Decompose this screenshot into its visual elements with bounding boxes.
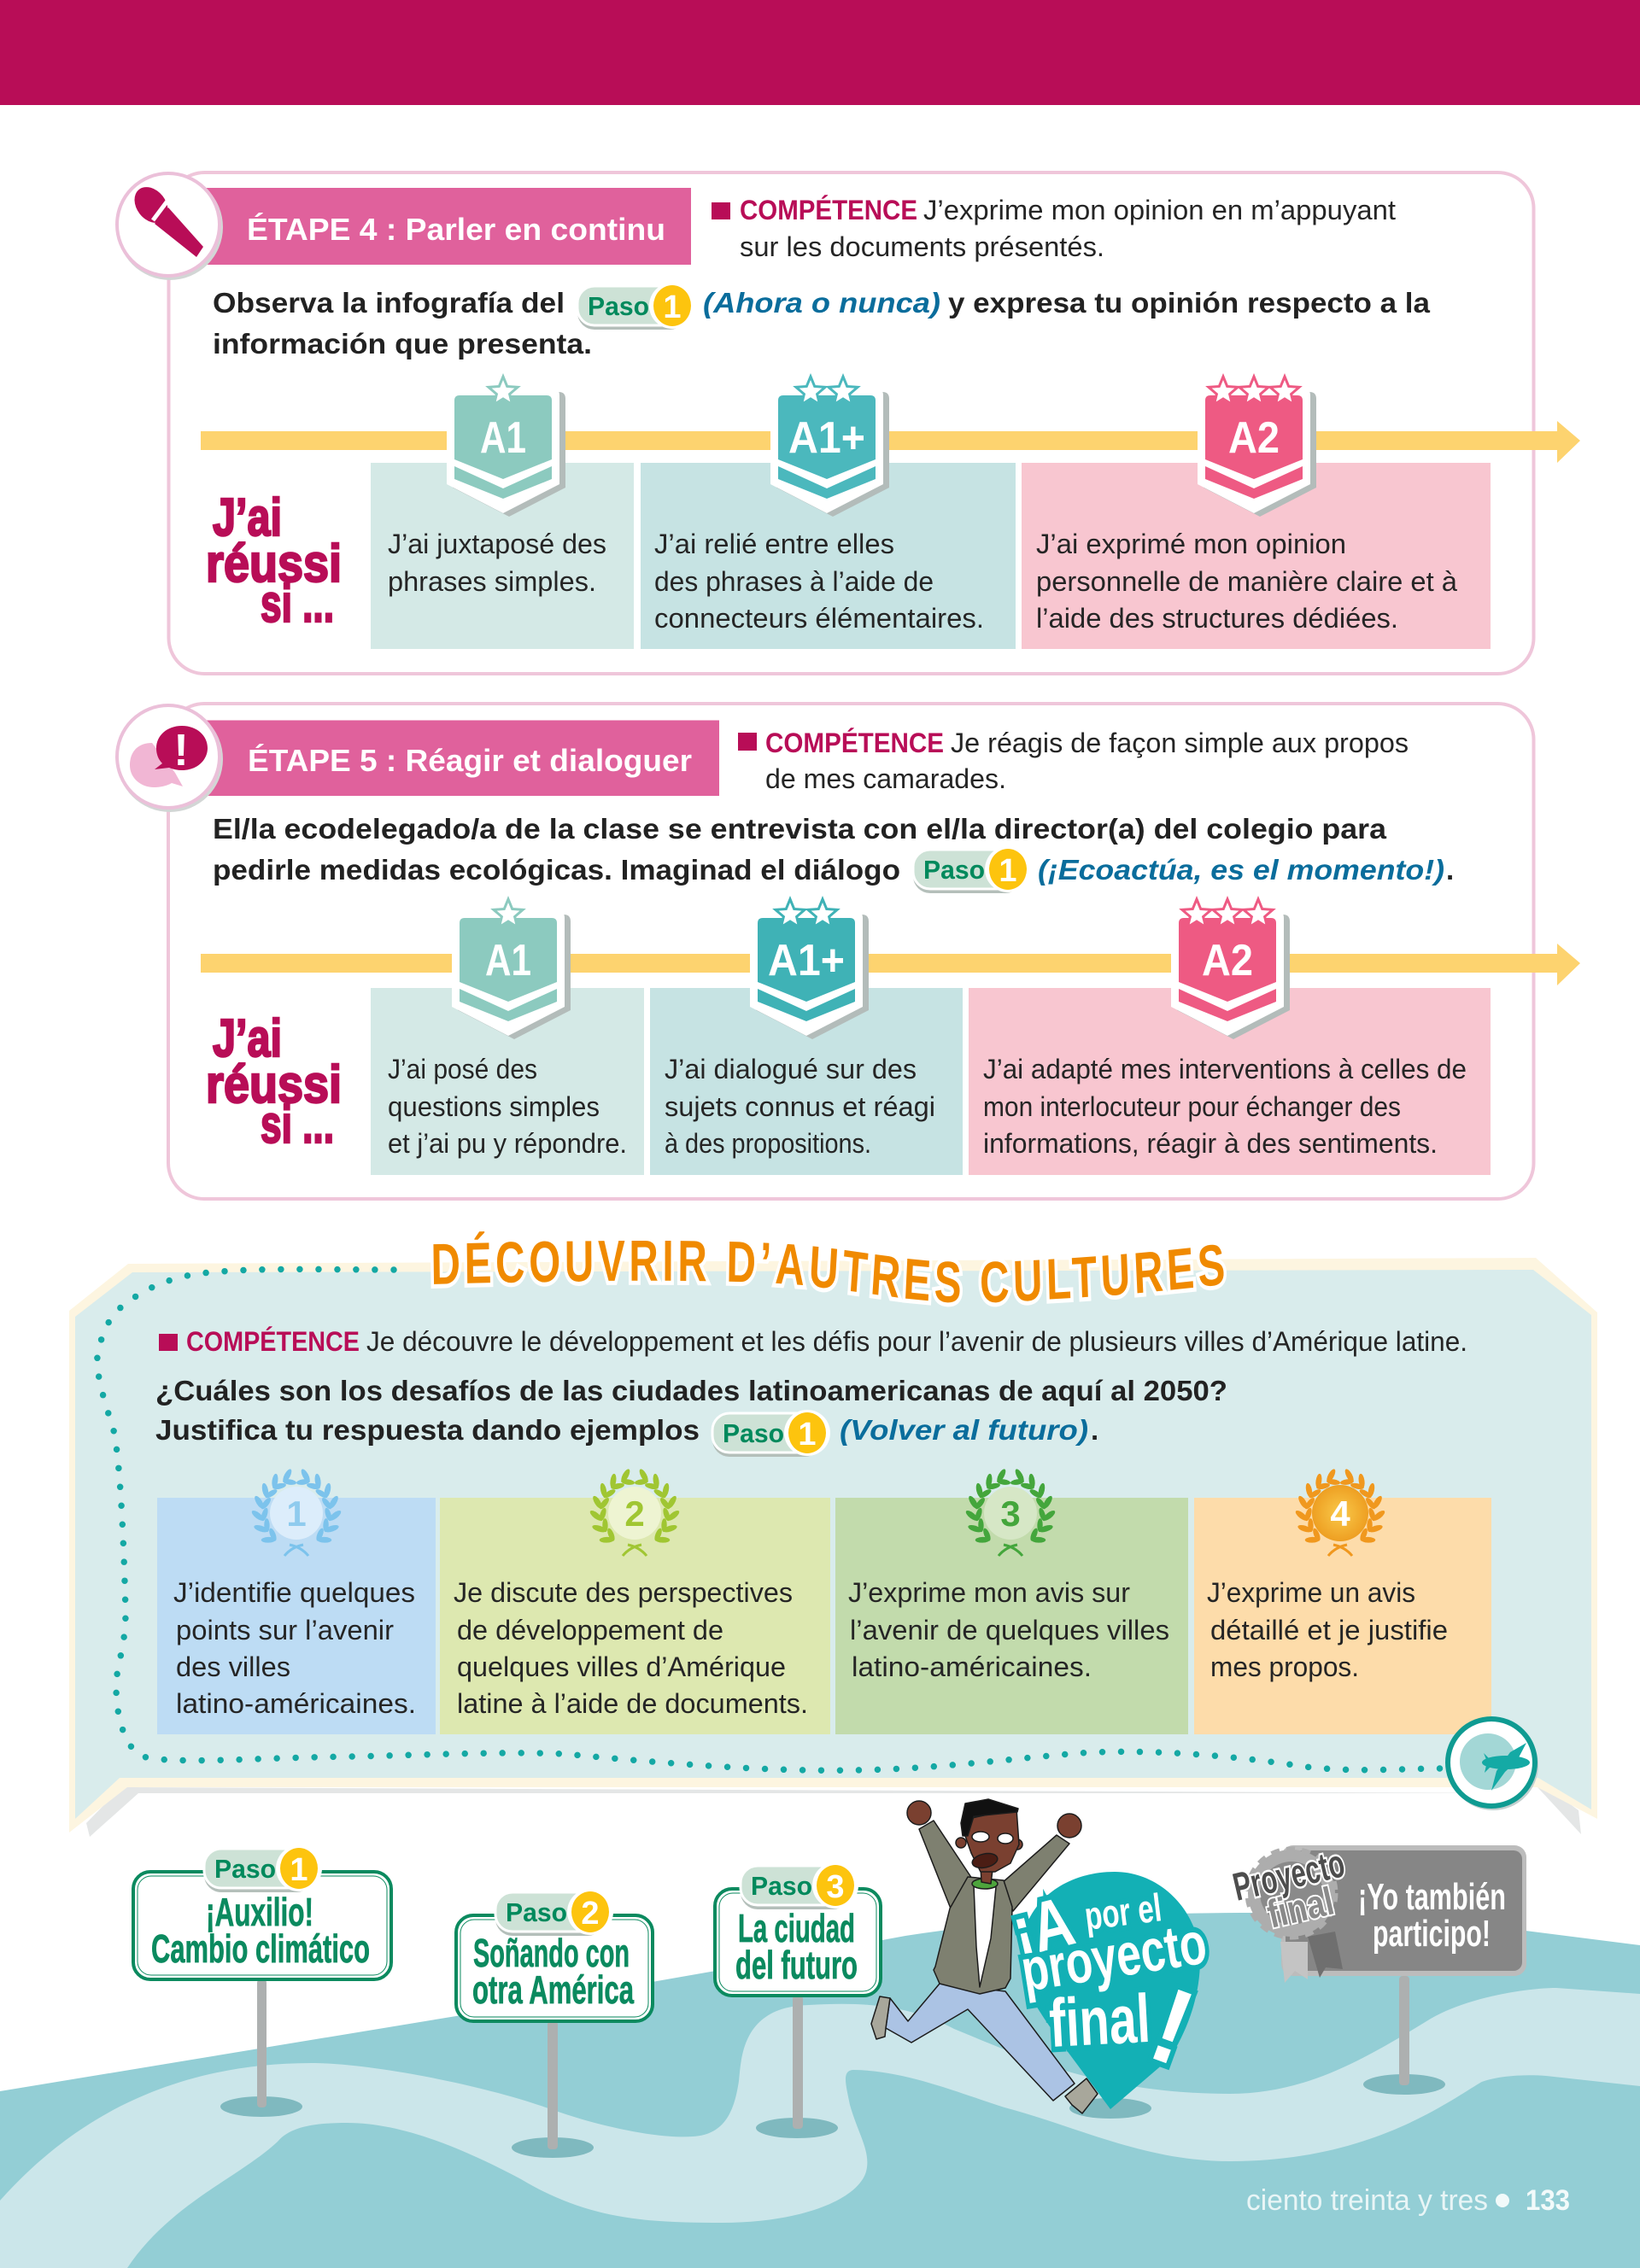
criteria box 2: quelques villes d’Amérique <box>457 1651 786 1682</box>
top header band <box>0 0 1640 105</box>
badge A1: A1 <box>480 413 526 463</box>
pin text: ! <box>1137 1966 1208 2088</box>
section title: DÉCOUVRIR D’AUTRES CULTURES <box>430 1231 1227 1306</box>
seal: final <box>1263 1879 1338 1937</box>
level box A1+: connecteurs élémentaires. <box>654 603 984 634</box>
badge A1 <box>452 899 571 1039</box>
criteria box 4: J’exprime un avis <box>1207 1577 1415 1608</box>
post and shadow <box>220 1979 302 2117</box>
J'ai réussi si: J’ai <box>213 1009 282 1068</box>
sign: paso 2 <box>456 1889 653 2158</box>
pill <box>204 1845 322 1892</box>
scenery: hills background <box>0 1913 1640 2268</box>
sign text: La ciudad <box>738 1906 855 1950</box>
pill: Paso <box>751 1871 812 1901</box>
level box A1 <box>371 988 644 1175</box>
pin text: ¡A <box>1004 1882 1081 1972</box>
compétence text: COMPÉTENCE <box>740 195 917 225</box>
ribbon shadow <box>86 1780 1581 1837</box>
level box A1+ <box>650 988 963 1175</box>
post and shadow <box>512 2021 594 2158</box>
board <box>456 1915 653 2021</box>
sign text <box>151 1890 370 1971</box>
criteria box 2: latine à l’aide de documents. <box>457 1688 808 1719</box>
pin text <box>1004 1882 1211 2088</box>
laurel 3: 3 <box>1000 1493 1021 1534</box>
icon: microphone <box>117 173 223 280</box>
timeline arrow <box>201 421 1580 463</box>
paso 1 pill: 1 <box>999 853 1017 889</box>
level box A2: personnelle de manière claire et à <box>1036 566 1457 597</box>
level box A2: J’ai exprimé mon opinion <box>1036 529 1346 559</box>
timeline arrow <box>201 944 1580 985</box>
criteria box 3 <box>835 1498 1188 1734</box>
illustration: jumping boy <box>871 1799 1098 2113</box>
level box A1: et j’ai pu y répondre. <box>388 1128 627 1159</box>
paso 1 pill: Paso <box>588 291 649 321</box>
level box A1: J’ai posé des <box>388 1054 537 1084</box>
ribbon <box>1280 1932 1343 1983</box>
badge A1+: A1+ <box>788 413 865 463</box>
collar <box>972 1879 998 1889</box>
instruction text: información que presenta. <box>213 328 592 359</box>
shirt <box>974 1885 996 1987</box>
compétence text: Je découvre le développement et les défis pour l’avenir de plusieurs villes d’Amérique latine. <box>366 1326 1467 1357</box>
sign text: Soñando con <box>473 1931 630 1975</box>
badge A1+: A1+ <box>768 936 845 985</box>
level box A1: phrases simples. <box>388 566 596 597</box>
compétence text <box>712 195 1396 262</box>
panel 4 frame <box>169 172 1534 674</box>
sign text: ¡Auxilio! <box>206 1890 313 1934</box>
compétence text <box>738 728 1409 794</box>
jacket sleeves <box>919 1821 1069 1911</box>
level box A2: informations, réagir à des sentiments. <box>983 1128 1438 1159</box>
compétence text: J’exprime mon opinion en m’appuyant <box>923 195 1396 225</box>
sign: proyecto final <box>1229 1840 1526 2095</box>
criteria box 4 <box>1194 1498 1491 1734</box>
icon: speech bubbles: ! <box>173 726 189 775</box>
level box A1 <box>371 463 634 649</box>
level box A1+: à des propositions. <box>665 1128 871 1159</box>
J'ai réussi si: réussi <box>206 535 342 593</box>
criteria box 1 <box>157 1498 436 1734</box>
icon: speech bubbles <box>117 705 223 812</box>
J'ai réussi si <box>206 1009 342 1154</box>
J'ai réussi si <box>206 488 342 634</box>
instruction text: Observa la infografía del <box>213 287 565 319</box>
criteria box 1: latino-américaines. <box>176 1688 416 1719</box>
badge A1+ <box>750 899 869 1039</box>
pin shape <box>1021 1872 1200 2109</box>
étape 5 heading <box>205 721 719 796</box>
criteria box 4: mes propos. <box>1210 1651 1359 1682</box>
level box A2: J’ai adapté mes interventions à celles de <box>983 1054 1467 1084</box>
sign: paso 1 <box>133 1845 391 2117</box>
pill: Paso <box>214 1854 276 1884</box>
level box A2 <box>969 988 1491 1175</box>
sign text: participo! <box>1373 1913 1491 1955</box>
criteria box 2 <box>440 1498 830 1734</box>
seal: Proyecto <box>1229 1840 1349 1909</box>
sign text <box>735 1906 858 1987</box>
badge A2 <box>1171 899 1290 1039</box>
sign text: ¡Yo también <box>1358 1876 1506 1918</box>
paso 1 pill: Paso <box>923 855 985 885</box>
J'ai réussi si: si ... <box>261 575 334 634</box>
panel: étape 5 <box>117 704 1580 1199</box>
page footer: 133 <box>1526 2184 1570 2217</box>
laurel 4 <box>1293 1466 1387 1556</box>
sign text: del futuro <box>735 1943 858 1987</box>
level box A2: l’aide des structures dédiées. <box>1036 603 1398 634</box>
ribbon fill <box>75 1270 1591 1819</box>
page footer: ciento treinta y tres <box>1246 2184 1488 2217</box>
dotted route <box>97 1269 1444 1770</box>
instruction text: (¡Ecoactúa, es el momento!) <box>1038 854 1444 886</box>
badge A2: A2 <box>1202 936 1253 985</box>
laurel 3 <box>964 1466 1057 1556</box>
hair <box>961 1799 1018 1836</box>
level box A1: J’ai juxtaposé des <box>388 529 606 559</box>
laurel 1: 1 <box>286 1493 307 1534</box>
J'ai réussi si: J’ai <box>213 488 282 547</box>
eyes <box>972 1832 1013 1844</box>
panel: découvrir d'autres cultures <box>69 1231 1597 1871</box>
jacket body <box>934 1877 1012 1994</box>
laurel 1 <box>249 1466 343 1556</box>
panel: étape 4 <box>117 172 1580 674</box>
laurel 2 <box>588 1466 682 1556</box>
fists <box>907 1801 1081 1838</box>
criteria box 1: des villes <box>176 1651 290 1682</box>
instruction text <box>155 1375 1227 1457</box>
badge A1: A1 <box>485 936 531 985</box>
pin: a por el proyecto final <box>1004 1872 1211 2109</box>
criteria box 2: de développement de <box>457 1615 723 1645</box>
criteria box 3: l’avenir de quelques villes <box>850 1615 1169 1645</box>
pill: 2 <box>581 1896 600 1932</box>
criteria box 2: Je discute des perspectives <box>454 1577 793 1608</box>
paso 1 pill <box>577 283 695 330</box>
pin text: proyecto <box>1016 1909 1211 2004</box>
level box A2 <box>1022 463 1491 649</box>
compétence text: COMPÉTENCE <box>765 728 944 758</box>
instruction text: ¿Cuáles son los desafíos de las ciudades latinoamericanas de aquí al 2050? <box>155 1375 1227 1406</box>
badge A2: A2 <box>1228 413 1280 463</box>
mouth <box>971 1851 999 1870</box>
compétence text: Je réagis de façon simple aux propos <box>951 728 1409 758</box>
instruction text: Justifica tu respuesta dando ejemplos <box>155 1414 700 1446</box>
instruction text: . <box>1446 854 1454 886</box>
paso 1 pill: 1 <box>798 1417 817 1453</box>
pill: Paso <box>506 1897 567 1927</box>
grey board <box>1281 1845 1526 1976</box>
level box A1+: sujets connus et réagi <box>665 1091 935 1122</box>
étape 5 heading: ÉTAPE 5 : Réagir et dialoguer <box>248 743 692 778</box>
badge A1 <box>447 377 565 517</box>
jeans <box>886 1984 1075 2101</box>
instruction text: (Ahora o nunca) <box>703 287 940 319</box>
shoes <box>871 1996 1098 2113</box>
instruction text: pedirle medidas ecológicas. Imaginad el diálogo <box>213 854 900 886</box>
paso 1 pill: 1 <box>663 289 682 325</box>
criteria box 4: détaillé et je justifie <box>1210 1615 1448 1645</box>
badge A1+ <box>770 377 889 517</box>
instruction text <box>213 283 1431 359</box>
seal <box>1229 1840 1349 1937</box>
compétence text: de mes camarades. <box>765 763 1006 794</box>
level box A1: questions simples <box>388 1091 600 1122</box>
sign text <box>472 1931 634 2012</box>
étape 4 heading: ÉTAPE 4 : Parler en continu <box>247 212 665 247</box>
compétence text: sur les documents présentés. <box>740 231 1104 262</box>
paso 1 pill <box>712 1410 830 1457</box>
board <box>715 1889 881 1996</box>
level box A1+: des phrases à l’aide de <box>654 566 934 597</box>
post and shadow <box>756 1996 838 2138</box>
pin text: por el <box>1082 1885 1164 1938</box>
neck and head <box>956 1809 1022 1884</box>
sign: paso 3 <box>715 1862 881 2138</box>
scenery: winding road <box>0 1988 1640 2268</box>
pill: 3 <box>826 1869 845 1905</box>
laurel 2: 2 <box>624 1493 645 1534</box>
J'ai réussi si: si ... <box>261 1096 334 1154</box>
icon: airplane <box>1448 1719 1538 1810</box>
J'ai réussi si: réussi <box>206 1055 342 1114</box>
pill: 1 <box>290 1852 308 1888</box>
sign text: Cambio climático <box>151 1926 370 1971</box>
paso 1 pill <box>913 846 1031 893</box>
panel 5 frame <box>168 704 1534 1199</box>
post and shadow <box>1363 1976 1445 2095</box>
instruction text: El/la ecodelegado/a de la clase se entrevista con el/la director(a) del colegio para <box>213 813 1387 845</box>
pin text: final <box>1047 1980 1152 2061</box>
level box A2: mon interlocuteur pour échanger des <box>983 1091 1401 1122</box>
instruction text <box>213 813 1454 893</box>
pill <box>495 1889 613 1936</box>
pill <box>741 1862 858 1909</box>
instruction text: y expresa tu opinión respecto a la <box>948 287 1431 319</box>
level box A1+ <box>641 463 1016 649</box>
instruction text: . <box>1091 1414 1098 1446</box>
sign text <box>1358 1876 1506 1955</box>
criteria box 3: latino-américaines. <box>852 1651 1092 1682</box>
laurel 4: 4 <box>1330 1493 1350 1534</box>
étape 4 heading <box>205 188 691 265</box>
criteria box 1: points sur l’avenir <box>176 1615 394 1645</box>
badge A2 <box>1198 377 1316 517</box>
instruction text: (Volver al futuro) <box>840 1414 1088 1446</box>
paso 1 pill: Paso <box>723 1418 784 1448</box>
sign text: otra América <box>472 1967 634 2012</box>
criteria box 1: J’identifie quelques <box>173 1577 415 1608</box>
pin shadow <box>1069 2098 1151 2119</box>
level box A1+: J’ai dialogué sur des <box>665 1054 917 1084</box>
criteria box 3: J’exprime mon avis sur <box>848 1577 1130 1608</box>
compétence text: COMPÉTENCE <box>186 1326 360 1357</box>
level box A1+: J’ai relié entre elles <box>654 529 894 559</box>
ribbon cream border <box>69 1258 1597 1833</box>
board <box>133 1872 391 1979</box>
